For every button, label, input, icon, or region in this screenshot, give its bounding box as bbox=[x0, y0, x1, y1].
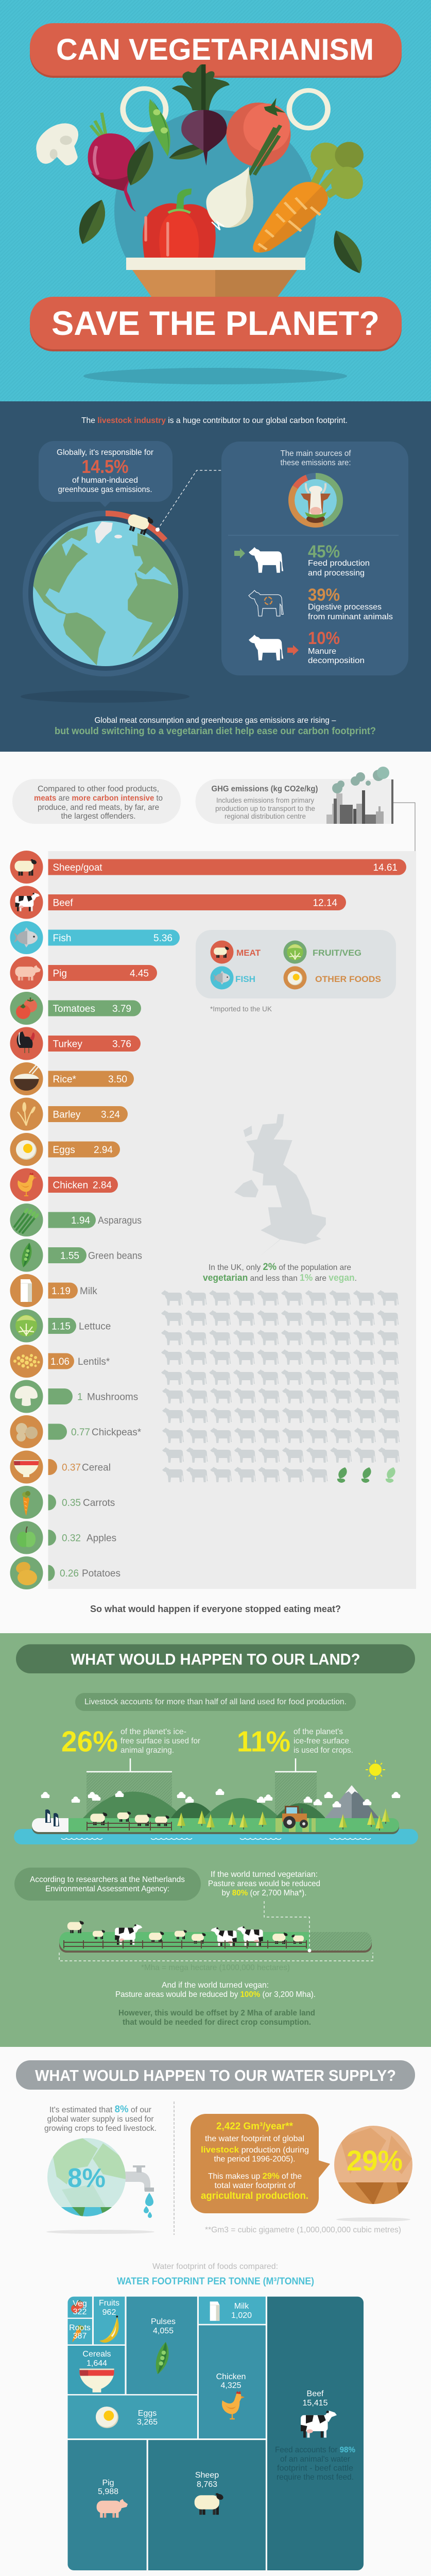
row: cereal: 0.37 bbox=[62, 1462, 81, 1473]
donut chart bbox=[291, 476, 340, 524]
icon: penguins bbox=[45, 1809, 59, 1826]
row: chickpeas: 0.77 bbox=[71, 1427, 90, 1438]
callout: 14.5 percent: 14.5% bbox=[81, 456, 129, 477]
ground strip bbox=[32, 1818, 399, 1834]
note: feed share bbox=[275, 2446, 355, 2482]
legend: FISH bbox=[235, 974, 255, 984]
icon: sun bbox=[366, 1760, 385, 1780]
transition question: So what would happen if everyone stopped eating meat? bbox=[90, 1604, 341, 1614]
heading: per tonne: WATER FOOTPRINT PER TONNE (M³/TONNE) bbox=[117, 2276, 314, 2287]
callout: meats are carbon intensive: produce, and red meats, by far, are bbox=[38, 803, 159, 812]
row: fish bbox=[10, 921, 180, 954]
row: lettuce: Lettuce bbox=[79, 1321, 111, 1332]
stat: 26 percent: free surface is used for bbox=[120, 1737, 201, 1745]
title banner bottom: SAVE THE PLANET? bbox=[51, 304, 380, 342]
callout: water footprint: 2,422 Gm³/year** bbox=[216, 2121, 294, 2132]
row: eggs bbox=[10, 1133, 120, 1166]
values in tonne treemap: 15,415 bbox=[303, 2399, 328, 2408]
callout: meats are carbon intensive: Compared to other food products, bbox=[38, 785, 159, 793]
values in tonne treemap: 1,644 bbox=[87, 2359, 107, 2368]
stat: manure: 10% bbox=[308, 629, 340, 648]
values in tonne treemap: 1,020 bbox=[231, 2311, 252, 2320]
legend: MEAT bbox=[236, 948, 261, 958]
row: rice: Rice* bbox=[53, 1074, 77, 1085]
row: lettuce: 1.15 bbox=[51, 1321, 71, 1332]
dashed connector bbox=[156, 470, 221, 532]
row: chickpeas bbox=[10, 1415, 142, 1448]
row: mushrooms: Mushrooms bbox=[87, 1392, 138, 1402]
values in tonne treemap: Eggs bbox=[138, 2409, 157, 2418]
stat: 11 percent: 11% bbox=[237, 1725, 290, 1758]
text: 8 percent: It's estimated that 8% of our bbox=[49, 2104, 152, 2115]
row: beef: 12.14 bbox=[313, 897, 337, 909]
text: 8 percent bbox=[44, 2104, 157, 2133]
row: asparagus: 1.94 bbox=[71, 1215, 90, 1226]
text: vegetarian pasture bbox=[208, 1870, 320, 1897]
subheading: compared: Water footprint of foods compared: bbox=[152, 2262, 278, 2271]
values in tonne treemap: 962 bbox=[102, 2308, 116, 2317]
stat: manure: Manure bbox=[308, 647, 336, 656]
row: mushrooms bbox=[10, 1380, 138, 1413]
row: milk: Milk bbox=[80, 1286, 97, 1297]
row: mushrooms: 1 bbox=[77, 1392, 83, 1402]
row: milk: 1.19 bbox=[51, 1286, 71, 1297]
stat: manure: decomposition bbox=[308, 656, 365, 665]
note: feed share: of an animal's water bbox=[280, 2455, 351, 2464]
values in tonne treemap: Veg bbox=[73, 2299, 87, 2308]
icon: grazing sheep bbox=[90, 1811, 170, 1826]
panel: food carbon comparison bbox=[0, 752, 431, 1633]
stat: 26 percent: animal grazing. bbox=[120, 1746, 174, 1755]
map: UK bbox=[234, 1114, 326, 1257]
callout: GHG emissions: regional distribution centre bbox=[225, 812, 306, 820]
values in tonne treemap: Milk bbox=[234, 2302, 249, 2311]
stat: digestive: Digestive processes bbox=[308, 603, 382, 612]
waves bbox=[61, 1838, 371, 1839]
note: feed share: Feed accounts for 98% bbox=[275, 2446, 355, 2454]
values in tonne treemap: Pulses bbox=[151, 2317, 176, 2326]
stat: feed: and processing bbox=[308, 569, 365, 578]
note: feed share: footprint - beef cattle bbox=[277, 2464, 353, 2473]
panel: livestock emissions bbox=[0, 401, 431, 752]
stat: feed: Feed production bbox=[308, 559, 370, 568]
arrow: coral out bbox=[287, 645, 299, 655]
row: carrots bbox=[10, 1486, 115, 1519]
intro text: The livestock industry is a huge contributor to our global carbon footprint. bbox=[81, 416, 348, 425]
globe: 8 percent: 8% bbox=[67, 2163, 106, 2193]
title banner bottom bbox=[30, 297, 402, 351]
connector line bbox=[393, 803, 415, 869]
row: lentils bbox=[10, 1345, 110, 1378]
heading: land: WHAT WOULD HAPPEN TO OUR LAND? bbox=[71, 1650, 360, 1668]
text: vegan pasture: And if the world turned vegan: bbox=[162, 1981, 269, 1990]
row: sheep: 14.61 bbox=[373, 862, 398, 873]
callout: water footprint: the period 1996-2005). bbox=[214, 2155, 296, 2164]
heading: land bbox=[16, 1645, 415, 1673]
text: vegetarian pasture: Pasture areas would be reduced bbox=[208, 1879, 320, 1888]
values in tonne treemap: Roots bbox=[69, 2324, 91, 2332]
UK vegetarian text: vegetarian and less than 1% are vegan. bbox=[203, 1273, 357, 1283]
footnote: Mha: *Mha = mega hectare (1000,000 hectares) bbox=[141, 1963, 290, 1972]
callout: water footprint: the water footprint of global bbox=[205, 2134, 304, 2143]
row: pig: Pig bbox=[53, 969, 67, 979]
callout: meats are carbon intensive: meats are more carbon intensive to bbox=[34, 794, 163, 803]
stat: digestive: from ruminant animals bbox=[308, 613, 393, 621]
callout: water footprint: total water footprint of bbox=[214, 2181, 296, 2190]
row: turkey: 3.76 bbox=[112, 1039, 131, 1050]
globe: 29 percent bbox=[334, 2126, 412, 2204]
values in tonne treemap: 387 bbox=[73, 2332, 87, 2341]
values in tonne treemap: 322 bbox=[73, 2308, 87, 2316]
stat: 11 percent bbox=[237, 1725, 353, 1758]
closing question: Global meat consumption and greenhouse gas emissions are rising – bbox=[95, 716, 336, 725]
row: chicken bbox=[10, 1168, 118, 1201]
icon: tap and drops bbox=[124, 2165, 154, 2218]
footnote: imported: *Imported to the UK bbox=[210, 1005, 272, 1013]
values in tonne treemap: Sheep bbox=[195, 2471, 219, 2480]
icon: bowl bbox=[126, 258, 305, 304]
panel: water bbox=[16, 2060, 415, 2570]
callout: researchers bbox=[14, 1868, 201, 1901]
row: barley bbox=[10, 1097, 128, 1130]
note: feed share: require the most feed. bbox=[277, 2473, 354, 2482]
text: arable offset: that would be needed for direct crop consumption. bbox=[123, 2018, 311, 2027]
row: lentils: 1.06 bbox=[50, 1357, 70, 1367]
icon: cow white bbox=[249, 547, 283, 573]
row: sheep bbox=[10, 851, 406, 884]
stat: manure bbox=[308, 629, 365, 665]
values in tonne treemap: 4,325 bbox=[220, 2381, 242, 2390]
values in tonne treemap: 3,265 bbox=[137, 2418, 158, 2427]
row: eggs: 2.94 bbox=[94, 1145, 113, 1156]
icon: carrot bbox=[253, 182, 328, 252]
stat: feed bbox=[308, 542, 370, 578]
panel: main sources: these emissions are: bbox=[280, 459, 351, 467]
UK vegetarian text: In the UK, only 2% of the population are bbox=[209, 1262, 351, 1273]
row: green beans: 1.55 bbox=[60, 1251, 79, 1261]
stat: 11 percent: ice-free surface bbox=[294, 1737, 349, 1745]
panel: header bbox=[0, 0, 431, 401]
text: arable offset bbox=[118, 2009, 315, 2027]
callout: researchers: According to researchers at the Netherlands bbox=[30, 1875, 185, 1884]
stat: 26 percent: of the planet's ice- bbox=[120, 1727, 186, 1736]
row: beef: Beef bbox=[53, 897, 73, 909]
row: lettuce bbox=[10, 1310, 111, 1343]
icon: tomato bbox=[226, 98, 290, 166]
stat: feed: 45% bbox=[308, 542, 340, 562]
callout: GHG emissions: Includes emissions from primary bbox=[216, 796, 314, 804]
stat: 26 percent: 26% bbox=[61, 1725, 118, 1758]
row: barley: Barley bbox=[53, 1110, 81, 1120]
callout: water footprint: This makes up 29% of the bbox=[208, 2171, 302, 2181]
row: cereal bbox=[10, 1451, 111, 1484]
row: tomatoes: 3.79 bbox=[112, 1004, 131, 1014]
callout: researchers: Environmental Assessment Agency: bbox=[45, 1885, 169, 1893]
callout: livestock land bbox=[75, 1693, 356, 1711]
chart: GHG emissions by food bbox=[10, 851, 416, 1589]
text: vegetarian pasture: by 80% (or 2,700 Mha*). bbox=[221, 1889, 307, 1897]
row: asparagus: Asparagus bbox=[98, 1215, 142, 1226]
text: arable offset: However, this would be offset by 2 Mha of arable land bbox=[118, 2009, 315, 2018]
icon: pepper bbox=[143, 189, 216, 258]
row: asparagus bbox=[10, 1204, 142, 1236]
row: green beans bbox=[10, 1239, 142, 1272]
title banner top bbox=[30, 23, 402, 78]
row: rice: 3.50 bbox=[108, 1074, 127, 1085]
fence bbox=[64, 1940, 307, 1948]
heading: water bbox=[16, 2060, 415, 2090]
icon: broccoli bbox=[311, 142, 364, 199]
bowl backdrop circle bbox=[114, 110, 316, 312]
row: milk bbox=[10, 1274, 97, 1307]
pasture reduction diagram bbox=[59, 1901, 373, 1961]
callout: 14.5 percent bbox=[39, 441, 173, 507]
row: turkey bbox=[10, 1027, 141, 1060]
callout: meats are carbon intensive bbox=[12, 779, 181, 824]
stat: digestive: 39% bbox=[308, 585, 340, 605]
icon: tractor bbox=[282, 1806, 308, 1828]
row: sheep: Sheep/goat bbox=[53, 862, 102, 873]
globe: 8 percent bbox=[47, 2138, 126, 2216]
heading: water: WHAT WOULD HAPPEN TO OUR WATER SUPPLY? bbox=[35, 2066, 396, 2084]
icon: cow white bbox=[249, 635, 283, 660]
icon: radish bbox=[88, 113, 136, 212]
row: apples: 0.32 bbox=[62, 1533, 81, 1544]
icon: leaf over radish bbox=[120, 138, 160, 189]
row: eggs: Eggs bbox=[53, 1145, 75, 1156]
callout: 14.5 percent: of human-induced bbox=[72, 476, 138, 485]
row: rice bbox=[10, 1062, 134, 1095]
arrow: green in bbox=[234, 548, 245, 558]
row: fish: 5.36 bbox=[153, 933, 173, 944]
dashed connectors bbox=[59, 1901, 373, 1961]
title banner top: CAN VEGETARIANISM bbox=[56, 33, 374, 66]
row: tomatoes: Tomatoes bbox=[53, 1004, 95, 1014]
row: lentils: Lentils* bbox=[78, 1357, 110, 1367]
callout: livestock land: Livestock accounts for more than half of all land used for food production. bbox=[84, 1698, 347, 1706]
closing question bbox=[55, 716, 376, 737]
row: apples: Apples bbox=[87, 1533, 116, 1544]
values in tonne treemap bbox=[69, 2299, 328, 2496]
panel: land bbox=[0, 1633, 431, 2047]
row: carrots: Carrots bbox=[83, 1498, 115, 1509]
fence bbox=[87, 1822, 172, 1831]
legend: OTHER FOODS bbox=[315, 974, 381, 984]
values in tonne treemap: Cereals bbox=[82, 2350, 111, 2359]
row: pig bbox=[10, 956, 157, 989]
icon: cow outline with digestion bbox=[249, 590, 283, 616]
row: green beans: Green beans bbox=[88, 1251, 142, 1261]
closing question: but would switching to a vegetarian diet help ease our carbon footprint? bbox=[55, 726, 376, 737]
row: chicken: Chicken bbox=[53, 1180, 88, 1191]
row: carrots: 0.35 bbox=[62, 1498, 81, 1509]
values in tonne treemap: 4,055 bbox=[153, 2327, 174, 2335]
landscape scene bbox=[14, 1758, 418, 1844]
callout: GHG emissions bbox=[196, 779, 393, 824]
treemap: water per tonne bbox=[67, 2297, 364, 2570]
text: vegan pasture bbox=[115, 1981, 316, 1999]
pictogram: population bbox=[161, 1290, 400, 1483]
text: vegan pasture: Pasture areas would be reduced by 100% (or 3,200 Mha). bbox=[115, 1990, 316, 1999]
callout: 14.5 percent: greenhouse gas emissions. bbox=[58, 485, 152, 494]
icons in tonne treemap bbox=[70, 2300, 337, 2518]
row: pig: 4.45 bbox=[130, 969, 149, 979]
icon: cow head bbox=[301, 483, 331, 523]
icon: sheep on globe bbox=[125, 511, 155, 537]
text: 8 percent: growing crops to feed livestock. bbox=[44, 2124, 157, 2133]
globe: 29 percent: 29% bbox=[347, 2144, 403, 2177]
values in tonne treemap: 5,988 bbox=[98, 2487, 118, 2496]
callout: GHG emissions: production up to transport to the bbox=[215, 804, 315, 812]
text: 8 percent: global water supply is used for bbox=[47, 2115, 154, 2124]
callout: 14.5 percent: Globally, it's responsible for bbox=[57, 448, 154, 457]
values in tonne treemap: Chicken bbox=[216, 2372, 246, 2381]
panel: main sources bbox=[221, 442, 408, 675]
icon: factory bbox=[326, 767, 393, 824]
row: chicken: 2.84 bbox=[93, 1180, 112, 1191]
icon: leaves bbox=[72, 140, 370, 277]
globe with 14.5 percent ring bbox=[23, 511, 188, 676]
icon: mushroom bbox=[36, 123, 78, 165]
row: potatoes bbox=[10, 1556, 120, 1589]
callout: meats are carbon intensive: the largest offenders. bbox=[61, 812, 136, 821]
callout: water footprint: livestock production (during bbox=[201, 2145, 309, 2155]
UK vegetarian text bbox=[203, 1262, 357, 1283]
stat: digestive bbox=[308, 585, 393, 621]
values in tonne treemap: Pig bbox=[102, 2479, 114, 2487]
trees bbox=[177, 1808, 390, 1831]
row: potatoes: Potatoes bbox=[82, 1568, 120, 1579]
values in tonne treemap: Fruits bbox=[99, 2299, 119, 2308]
row: turkey: Turkey bbox=[53, 1039, 82, 1050]
callout: water footprint: agricultural production. bbox=[201, 2191, 308, 2201]
values in tonne treemap: Beef bbox=[307, 2389, 324, 2398]
callout: water footprint bbox=[191, 2114, 330, 2213]
stat: 26 percent bbox=[61, 1725, 201, 1758]
row: barley: 3.24 bbox=[101, 1110, 120, 1120]
icon: pea pod bbox=[149, 99, 170, 157]
row: chickpeas: Chickpeas* bbox=[92, 1427, 142, 1438]
vegetables illustration bbox=[36, 64, 370, 277]
callout: GHG emissions: GHG emissions (kg CO2e/kg) bbox=[211, 785, 318, 793]
stat: 11 percent: is used for crops. bbox=[294, 1746, 353, 1755]
row: cereal: Cereal bbox=[82, 1462, 111, 1473]
row: potatoes: 0.26 bbox=[60, 1568, 79, 1579]
row: tomatoes bbox=[10, 992, 141, 1025]
stat: 11 percent: of the planet's bbox=[294, 1727, 343, 1736]
text: vegetarian pasture: If the world turned vegetarian: bbox=[211, 1870, 318, 1879]
footnote: Gm3: **Gm3 = cubic gigametre (1,000,000,000 cubic metres) bbox=[205, 2226, 401, 2234]
row: beef bbox=[10, 886, 346, 919]
values in tonne treemap: 8,763 bbox=[197, 2480, 217, 2489]
row: apples bbox=[10, 1521, 116, 1554]
icon: onion rings bbox=[123, 89, 328, 130]
water bbox=[14, 1829, 418, 1844]
icon: beetroot bbox=[172, 64, 230, 165]
legend: FRUIT/VEG bbox=[313, 948, 361, 958]
animals bbox=[67, 1921, 304, 1947]
row: fish: Fish bbox=[53, 933, 71, 944]
icon: onion bbox=[206, 125, 281, 230]
panel: main sources: The main sources of bbox=[280, 449, 351, 458]
legend bbox=[196, 930, 396, 998]
